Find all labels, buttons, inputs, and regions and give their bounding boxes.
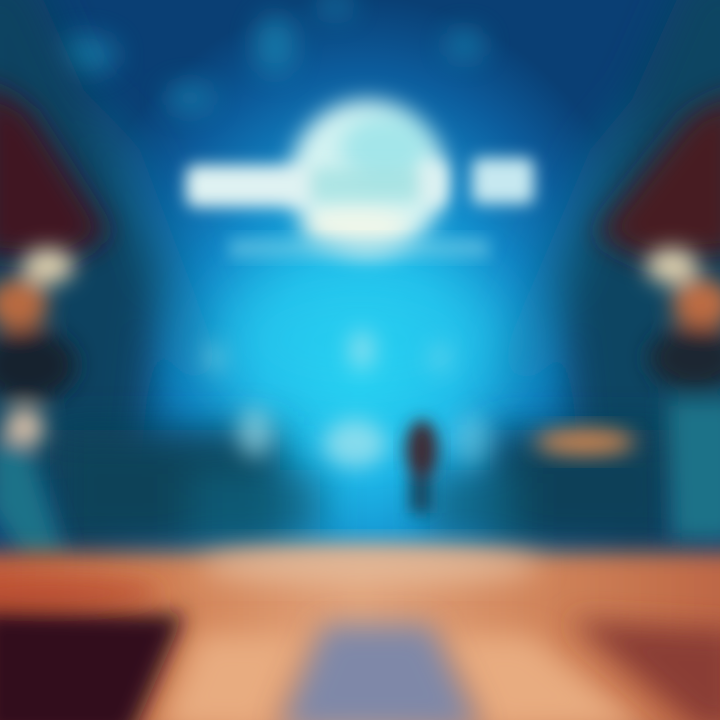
left wall red wedge [0,80,110,262]
orange glow, right [535,429,635,455]
right figure [646,248,720,540]
central walkway [280,625,480,720]
moon [290,100,446,256]
left figure [0,248,76,578]
dark right floor edge [570,620,720,720]
floor light panel, right [445,635,650,720]
skyline silhouettes [50,430,680,550]
floor glow [200,547,540,583]
blurred subtitle [228,238,490,258]
central figure [406,420,438,513]
floor [0,547,720,720]
distant glowing towers [203,330,492,468]
left building wall [0,0,220,490]
right wall red wedge [595,90,720,262]
sky sparkles [53,0,483,110]
right building wall [500,0,720,490]
central cyan glow [210,255,510,425]
blurred headline [186,158,534,207]
foreground dark shape, bottom left [0,579,185,720]
floor light panel, left [160,635,305,720]
